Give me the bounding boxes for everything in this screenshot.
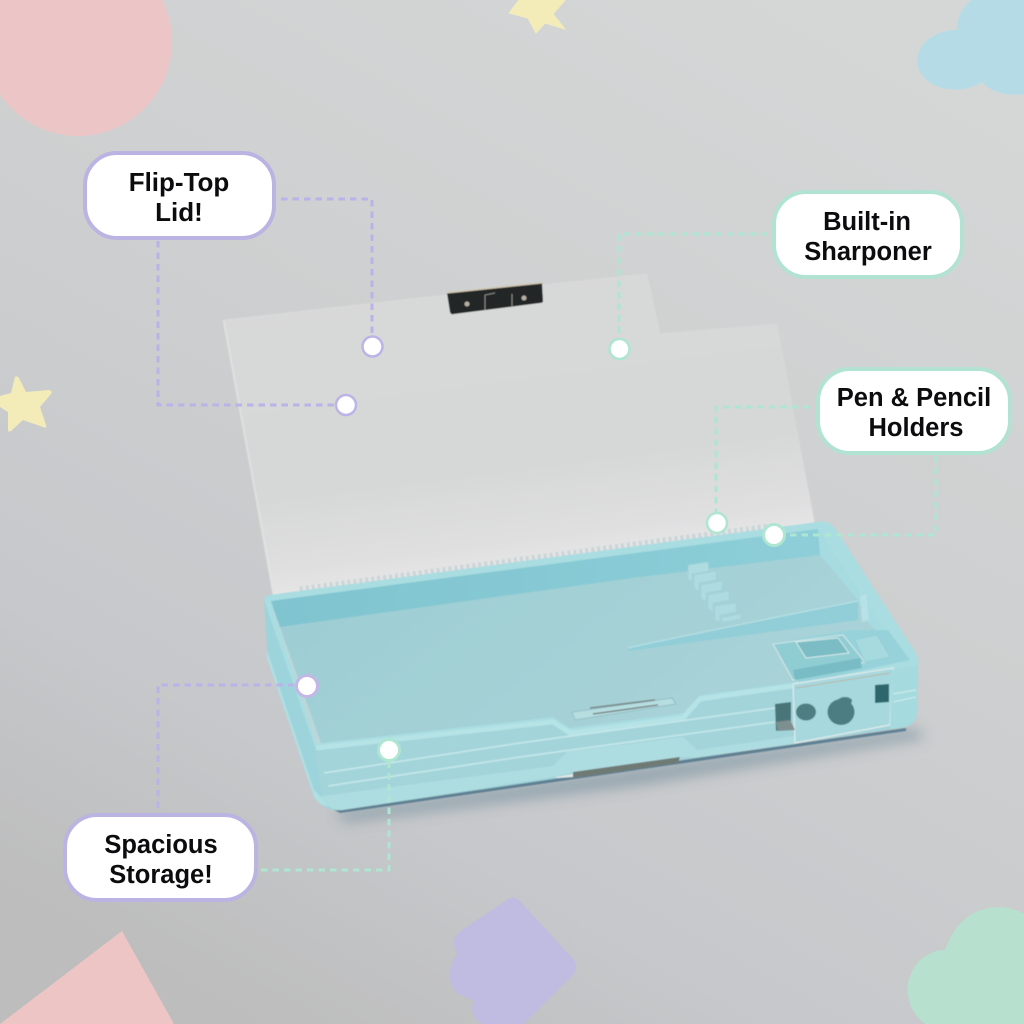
left inner rim: [270, 601, 321, 744]
decorative yellow star left: [0, 376, 52, 432]
decorative blue cloud: [917, 0, 1024, 95]
callout: Spacious Storage: Spacious: [104, 831, 218, 859]
connector: pen holders right: [786, 456, 936, 535]
callout: Flip-Top Lid: [85, 153, 274, 238]
divider wall: [628, 594, 869, 651]
marker: storage front: [378, 740, 400, 760]
marker: pen holder left: [707, 513, 727, 533]
front lip: [322, 736, 795, 810]
sharpener front panel: [793, 668, 893, 743]
connector: flip-top lid right: [281, 199, 372, 335]
lid hinge plate: [447, 283, 543, 314]
callout: Pen & Pencil Holders: [818, 369, 1010, 453]
callout: Pen & Pencil Holders: Pen & Pencil: [837, 384, 991, 412]
front wall top band: [316, 686, 792, 748]
marker: sharpener: [610, 339, 630, 359]
lid: [224, 275, 813, 594]
lid left edge highlight: [224, 321, 274, 592]
lid hinge teeth: [300, 527, 770, 590]
inner floor: [280, 555, 900, 743]
front wall: [315, 684, 795, 808]
connector: pen holders left: [716, 407, 810, 512]
case shadow: [335, 728, 925, 822]
callout: Spacious Storage: [65, 815, 256, 900]
front wall ridges: [324, 708, 775, 786]
decorative yellow star top: [509, 0, 565, 33]
decorative pink triangle: [0, 931, 174, 1024]
marker: pen holder right: [764, 524, 784, 546]
case body silhouette: [264, 522, 918, 810]
marker: storage left: [296, 676, 318, 696]
callout: Spacious Storage: Storage!: [109, 861, 213, 889]
clasp: [555, 698, 680, 778]
sharpener transparent top: [773, 635, 865, 680]
sharpener button: [855, 635, 890, 662]
right inner wall: [818, 529, 900, 656]
right end lip: [890, 665, 918, 729]
sharpener holes: [796, 704, 816, 720]
connector: built-in sharpener: [619, 234, 768, 338]
marker: lid lower: [336, 395, 356, 415]
callout: Flip-Top Lid: Lid!: [155, 197, 203, 227]
connector: spacious storage right: [261, 761, 389, 870]
callout: Flip-Top Lid: Flip-Top: [129, 167, 229, 197]
cavity back wall: [271, 529, 900, 743]
decorative mint cloud: [908, 907, 1024, 1024]
marker: lid top: [362, 336, 382, 356]
sharpener module: [773, 630, 910, 743]
callout: Built-in Sharponer: Sharponer: [804, 238, 932, 266]
decorative lavender shape: [450, 898, 576, 1024]
decorative pink circle: [0, 0, 172, 136]
callout: Pen & Pencil Holders: Holders: [869, 414, 963, 442]
rim top surface: [264, 522, 918, 750]
pen holder ridges: [688, 562, 741, 622]
callout: Built-in Sharponer: [774, 192, 962, 277]
connector: flip-top lid down: [158, 241, 336, 405]
callout: Built-in Sharponer: Built-in: [823, 208, 911, 236]
connector: spacious storage up: [158, 685, 296, 808]
pencil case: [224, 275, 925, 822]
left side wall: [264, 600, 322, 797]
